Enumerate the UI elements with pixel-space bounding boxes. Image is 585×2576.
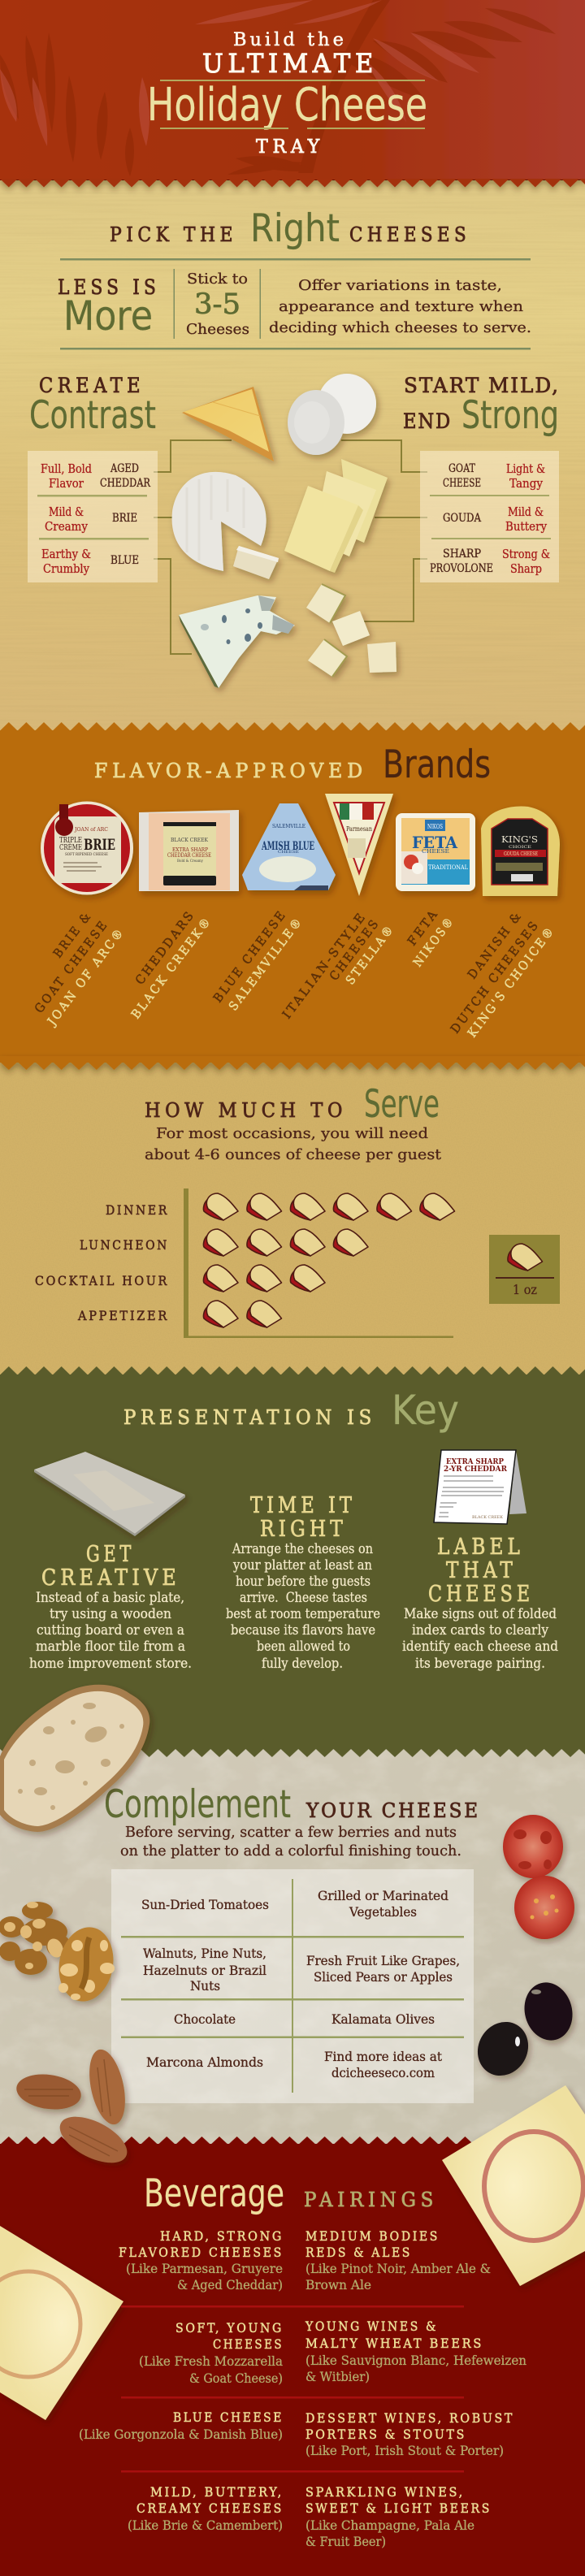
table: complement ideas: Nuts [190, 1978, 220, 1994]
column: time it right [226, 1493, 380, 1672]
panel: cheese contrast board [28, 374, 560, 688]
heading: start mild end strong: START MILD, [404, 374, 560, 397]
panel: beverage pairings [0, 2085, 585, 2549]
title: ULTIMATE [202, 48, 378, 79]
decorative palm fronds [0, 0, 556, 176]
column: label that cheese: LABEL [437, 1535, 524, 1560]
product: nikos feta: FETA [412, 833, 457, 852]
table: flavor right: GOUDA [443, 512, 482, 525]
rotated label: italian-style cheeses: ITALIAN-STYLE [280, 909, 369, 1021]
column: get creative: Instead of a basic plate, [36, 1590, 184, 1606]
heading: Right [250, 206, 340, 251]
rotated label: feta: FETA [405, 906, 441, 948]
product: salemville amish blue [242, 803, 336, 890]
row: dinner [106, 1193, 455, 1220]
rotated label: italian-style cheeses: STELLA® [343, 921, 397, 987]
stick to 3-5 cheeses: 3-5 [194, 288, 240, 321]
rotated label: danish and dutch cheeses: DANISH & [465, 908, 525, 981]
stick to 3-5 cheeses: Cheeses [186, 321, 249, 338]
row: luncheon [80, 1229, 368, 1256]
variation advice: deciding which cheeses to serve. [269, 319, 531, 336]
column: time it right: your platter at least an [232, 1557, 372, 1574]
heading: create contrast: Contrast [29, 393, 156, 438]
product: black creek cheddar: Bold & Creamy [177, 859, 203, 864]
row: luncheon: LUNCHEON [80, 1237, 169, 1253]
table: flavor left: CHEDDAR [100, 477, 150, 490]
panel: header banner [0, 0, 585, 187]
pairing row 2 [139, 2318, 526, 2386]
row: cocktail hour [35, 1265, 325, 1292]
column: label that cheese: Make signs out of folded [404, 1606, 557, 1622]
product: king's choice gouda [481, 806, 560, 896]
heading [144, 2171, 438, 2216]
column: label that cheese: identify each cheese and [402, 1639, 558, 1655]
less is more [58, 275, 160, 340]
heading: HOW MUCH TO [145, 1099, 347, 1122]
table: complement ideas: Grilled or Marinated [318, 1888, 448, 1903]
panel: complement your cheese [0, 1685, 578, 2172]
heading: start mild end strong: Strong [462, 393, 559, 438]
table: complement ideas: Chocolate [174, 2011, 236, 2027]
column: time it right: fully develop. [262, 1656, 343, 1672]
product: king's choice gouda: CHOICE [509, 845, 531, 850]
table: flavor right: SHARP [443, 548, 481, 561]
rotated label: italian-style cheeses: CHEESES [327, 916, 383, 983]
cheese: aged cheddar [182, 387, 274, 461]
cheese: brie wheel [172, 472, 279, 579]
icon: cherry tomatoes [503, 1815, 574, 1939]
column: time it right: because its flavors have [231, 1622, 375, 1639]
heading: start mild end strong [403, 374, 560, 438]
table: flavor left: Mild & [49, 504, 84, 519]
rotated label: brie and goat cheese: BRIE & [50, 908, 95, 960]
product: nikos feta [396, 813, 475, 891]
pairing row 3: BLUE CHEESE [173, 2409, 284, 2425]
table: flavor right: Tangy [509, 476, 543, 491]
table: flavor left: Full, Bold [41, 461, 92, 476]
stick to 3-5 cheeses [186, 271, 249, 338]
product: salemville amish blue: AMISH BLUE [261, 840, 314, 853]
product: stella parmesan [325, 794, 393, 896]
heading: Beverage [144, 2171, 284, 2216]
heading: CHEESES [349, 223, 470, 246]
pairing row 2: MALTY WHEAT BEERS [306, 2336, 483, 2351]
heading [110, 206, 470, 251]
rotated label: feta: NIKOS® [410, 913, 457, 969]
product: brie package: TRIPLE [59, 837, 82, 845]
rotated label: brie and goat cheese: JOAN OF ARC® [44, 924, 128, 1029]
table: flavor right [420, 451, 559, 582]
column: get creative: CREATIVE [41, 1565, 180, 1591]
rotated label: blue cheese: BLUE CHEESE [210, 907, 289, 1005]
pairing row 2: (Like Sauvignon Blanc, Hefeweizen [306, 2353, 526, 2368]
table: complement ideas: Marcona Almonds [146, 2054, 263, 2070]
icon: folded index card: EXTRA SHARP [446, 1458, 504, 1466]
legend: 1 oz: 1 oz [513, 1282, 537, 1297]
pairing row 3: (Like Port, Irish Stout & Porter) [306, 2443, 504, 2458]
heading: FLAVOR-APPROVED [94, 760, 367, 782]
row: cocktail hour: COCKTAIL HOUR [35, 1273, 169, 1288]
napkin with wine ring left [0, 2226, 124, 2420]
icon: kalamata olives [468, 1977, 578, 2085]
panel: flavor-approved brands [32, 742, 560, 1040]
heading: Brands [383, 742, 491, 787]
pairing row 2: & Witbier) [306, 2369, 370, 2384]
table: flavor left [28, 451, 158, 582]
pairing row 1: & Aged Cheddar) [177, 2277, 283, 2292]
icon: folded index card [434, 1450, 526, 1524]
table: complement ideas [111, 1869, 474, 2103]
table: flavor left: Creamy [45, 519, 88, 534]
variation advice: appearance and texture when [279, 298, 523, 315]
intro text: For most occasions, you will need [156, 1125, 428, 1142]
heading: create contrast [29, 374, 156, 438]
title [147, 30, 427, 158]
table: flavor left: Flavor [49, 476, 84, 491]
table: flavor left: BRIE [112, 512, 137, 525]
icon: almonds [14, 2046, 134, 2172]
icon: folded index card: 2-YR CHEDDAR [444, 1466, 508, 1474]
product: salemville amish blue: CHEESE [278, 850, 299, 855]
column: label that cheese: THAT [446, 1558, 517, 1583]
product: brie package: SOFT RIPENED CHEESE [65, 852, 108, 857]
product: black creek cheddar: BLACK CREEK [171, 838, 209, 843]
heading: Complement [104, 1782, 291, 1827]
product: salemville amish blue: SALEMVILLE [272, 824, 306, 829]
column: time it right: been allowed to [257, 1639, 350, 1655]
table: flavor right: Buttery [505, 519, 547, 534]
heading [145, 1082, 440, 1127]
column: label that cheese: index cards to clearly [412, 1622, 548, 1639]
table: complement ideas: Find more ideas at [324, 2049, 443, 2064]
table: flavor left: Crumbly [43, 561, 89, 576]
icon: walnuts [0, 1902, 119, 2006]
pairing row 1: MEDIUM BODIES [306, 2228, 440, 2244]
pairing row 4: SPARKLING WINES, [306, 2484, 465, 2500]
pairing row 4: (Like Brie & Camembert) [128, 2518, 283, 2533]
column: get creative: marble floor tile from a [36, 1639, 185, 1655]
cheese: provolone cubes [306, 584, 396, 677]
column: get creative: GET [86, 1542, 135, 1567]
pairing row 2: SOFT, YOUNG [176, 2320, 284, 2336]
cheese: goat cheese [288, 374, 376, 455]
column: time it right: hour before the guests [236, 1574, 370, 1590]
column: time it right: arrive. Cheese tastes [240, 1590, 367, 1606]
row: appetizer [77, 1301, 281, 1327]
heading: YOUR CHEESE [306, 1799, 480, 1822]
title: TRAY [256, 136, 324, 158]
column: time it right: TIME IT [250, 1493, 356, 1518]
product: black creek cheddar: CHEDDAR CHEESE [167, 852, 211, 859]
rotated label: danish and dutch cheeses: KING'S CHOICE® [465, 923, 558, 1040]
pairing row 4: MILD, BUTTERY, [150, 2484, 284, 2500]
table: flavor left: Earthy & [41, 547, 91, 561]
title: Holiday Cheese [147, 79, 427, 132]
heading: PAIRINGS [304, 2189, 438, 2211]
pairing row 3: PORTERS & STOUTS [306, 2427, 466, 2442]
pairing row 3: DESSERT WINES, ROBUST [306, 2410, 514, 2426]
product: nikos feta: CHEESE [422, 849, 449, 855]
panel: presentation is key [29, 1387, 558, 1672]
product: black creek cheddar: EXTRA SHARP [172, 846, 209, 853]
connector lines [154, 440, 427, 654]
rotated label: cheddars: BLACK CREEK® [128, 913, 214, 1021]
heading [94, 742, 491, 787]
stick to 3-5 cheeses: Stick to [187, 271, 248, 288]
table: complement ideas: Sliced Pears or Apples [314, 1969, 453, 1985]
table: flavor left: AGED [110, 462, 139, 475]
table: complement ideas: Vegetables [349, 1904, 417, 1920]
less is more: LESS IS [58, 275, 160, 299]
column: label that cheese: its beverage pairing. [415, 1656, 545, 1672]
row: dinner: DINNER [106, 1202, 169, 1218]
table: complement ideas: dcicheeseco.com [332, 2065, 435, 2080]
heading [104, 1782, 480, 1827]
pairing row 2: & Goat Cheese) [189, 2370, 283, 2386]
intro text: Before serving, scatter a few berries and nuts [125, 1824, 457, 1841]
row: appetizer: APPETIZER [77, 1308, 169, 1323]
table: complement ideas: Hazelnuts or Brazil [143, 1963, 266, 1978]
pairing row 2: YOUNG WINES & [305, 2318, 438, 2334]
heading: start mild end strong: END [403, 409, 452, 433]
pairing row 1: HARD, STRONG [160, 2228, 284, 2244]
product: nikos feta: NIKOS [427, 823, 443, 830]
rotated label: brie and goat cheese: GOAT CHEESE [32, 917, 111, 1015]
pairing row 1 [119, 2228, 491, 2292]
pairing row 4: CREAMY CHEESES [136, 2500, 284, 2516]
pairing row 3 [79, 2409, 514, 2458]
product: brie package [41, 801, 133, 895]
pairing row 2: CHEESES [213, 2336, 284, 2352]
column: get creative: home improvement store. [29, 1656, 192, 1672]
table: complement ideas: Sun-Dried Tomatoes [141, 1897, 269, 1912]
column: get creative [29, 1452, 192, 1672]
heading: create contrast: CREATE [39, 374, 145, 397]
product: stella parmesan: Parmesan [346, 825, 372, 833]
icon: marble tile [34, 1452, 185, 1536]
table: flavor right: Light & [506, 461, 545, 476]
table: flavor right: PROVOLONE [430, 562, 493, 575]
panel: how much to serve [35, 1082, 560, 1338]
column: time it right: RIGHT [260, 1517, 347, 1542]
table: complement ideas: Walnuts, Pine Nuts, [143, 1946, 266, 1961]
icon: folded index card: BLACK CREEK [472, 1515, 504, 1520]
column: label that cheese [402, 1450, 558, 1672]
product: brie package: JOAN of ARC [74, 826, 108, 833]
heading: Key [392, 1387, 459, 1434]
heading [124, 1387, 459, 1434]
table: flavor right: Mild & [508, 504, 544, 519]
column: time it right: Arrange the cheeses on [232, 1541, 373, 1557]
rotated label: blue cheese: SALEMVILLE® [226, 914, 306, 1013]
panel: pick the right cheeses [58, 206, 531, 349]
heading: PRESENTATION IS [124, 1406, 376, 1429]
intro text [120, 1824, 462, 1859]
pairing row 1: Brown Ale [306, 2277, 371, 2292]
table: flavor left: BLUE [110, 554, 139, 567]
table: flavor right: CHEESE [443, 477, 481, 490]
pairing row 4 [128, 2484, 492, 2549]
heading: PICK THE [110, 223, 237, 246]
legend: 1 oz [489, 1235, 560, 1304]
product: brie package: BRIE [84, 836, 115, 854]
table: complement ideas: Kalamata Olives [332, 2011, 435, 2027]
table: flavor right: Strong & [502, 547, 550, 561]
product: king's choice gouda: GOUDA CHEESE [504, 851, 538, 857]
pictogram chart [35, 1188, 455, 1338]
pairing row 1: FLAVORED CHEESES [119, 2245, 284, 2260]
pairing row 4: (Like Champagne, Pala Ale [306, 2518, 474, 2533]
heading: Serve [364, 1082, 440, 1127]
cheese: blue wedge [179, 595, 295, 688]
pairing row 1: (Like Parmesan, Gruyere [126, 2261, 283, 2276]
product: black creek cheddar [139, 810, 239, 891]
pairing row 4: SWEET & LIGHT BEERS [306, 2500, 492, 2516]
product: nikos feta: TRADITIONAL [428, 864, 468, 871]
icon: bread slice [0, 1685, 150, 1832]
column: time it right: best at room temperature [226, 1606, 380, 1622]
column: label that cheese: CHEESE [428, 1582, 534, 1607]
variation advice [269, 277, 531, 336]
pairing row 2: (Like Fresh Mozzarella [139, 2353, 283, 2369]
variation advice: Offer variations in taste, [298, 277, 502, 294]
table: flavor right: GOAT [448, 462, 476, 475]
table: complement ideas: Fresh Fruit Like Grapes, [306, 1953, 460, 1968]
title: Build the [233, 30, 347, 50]
rotated label: cheddars: CHEDDARS [132, 907, 197, 987]
column: get creative: cutting board or even a [37, 1622, 184, 1639]
table: flavor right: Sharp [510, 561, 542, 576]
pairing row 1: (Like Pinot Noir, Amber Ale & [306, 2261, 491, 2276]
napkin with wine ring right [442, 2085, 585, 2286]
pairing row 3: (Like Gorgonzola & Danish Blue) [79, 2427, 283, 2442]
column: get creative: try using a wooden [50, 1606, 171, 1622]
less is more: More [63, 292, 153, 340]
intro text [145, 1125, 442, 1163]
product: brie package: CRÈME [59, 842, 82, 852]
pairing row 1: REDS & ALES [306, 2245, 412, 2260]
intro text: about 4-6 ounces of cheese per guest [145, 1146, 442, 1163]
intro text: on the platter to add a colorful finishing touch. [120, 1842, 462, 1859]
rotated label: danish and dutch cheeses: DUTCH CHEESES [448, 917, 543, 1036]
product: king's choice gouda: KING'S [501, 834, 538, 845]
pairing row 4: & Fruit Beer) [306, 2534, 386, 2549]
cheese: gouda slices [284, 459, 388, 573]
